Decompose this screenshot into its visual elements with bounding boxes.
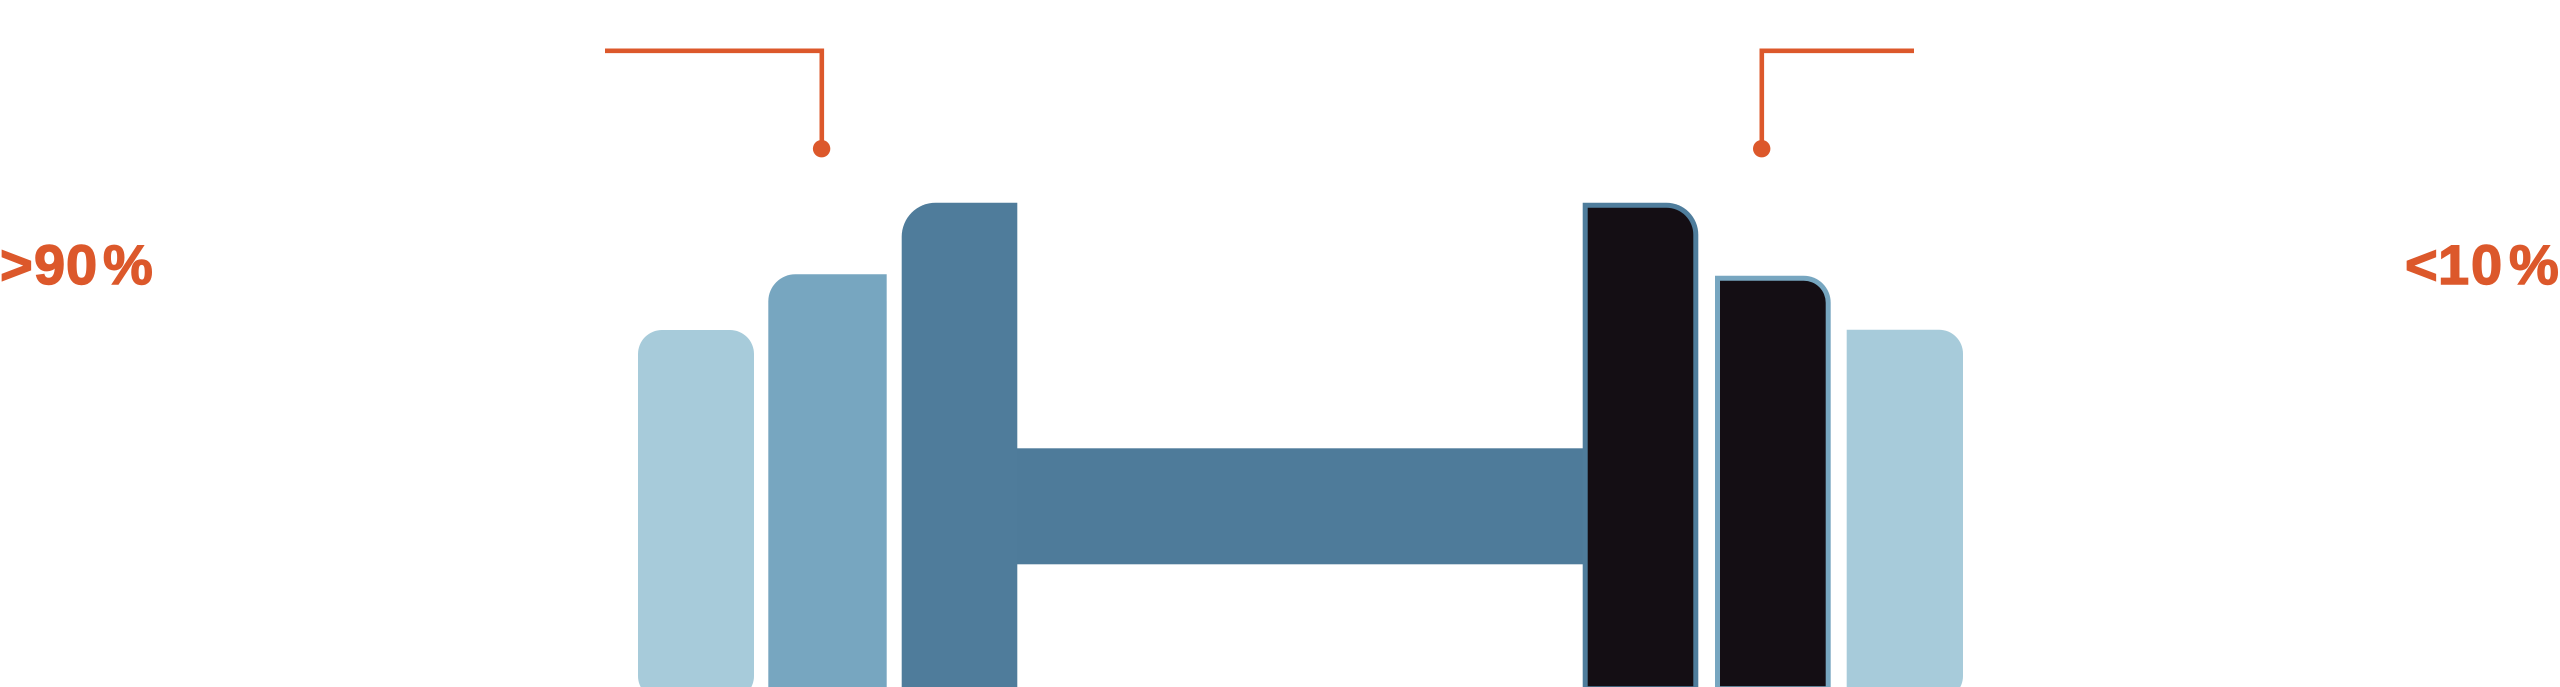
left inner plate xyxy=(902,203,1017,687)
left middle plate xyxy=(768,274,887,687)
right callout line xyxy=(1762,51,1914,148)
right outer plate xyxy=(1847,330,1963,687)
dumbbell xyxy=(638,203,1963,687)
right middle plate fill xyxy=(1720,281,1826,686)
left callout connector xyxy=(605,51,830,157)
right callout dot xyxy=(1753,140,1770,157)
left percentage label: >90% xyxy=(0,233,153,296)
right inner plate border xyxy=(1583,203,1698,687)
right middle plate border xyxy=(1715,276,1831,687)
right inner plate xyxy=(1583,203,1698,687)
left callout line xyxy=(605,51,822,148)
left outer plate xyxy=(638,330,754,687)
right percentage label: <10% xyxy=(2405,233,2559,296)
right callout connector xyxy=(1753,51,1914,157)
right inner plate fill xyxy=(1588,208,1693,686)
right middle plate xyxy=(1715,276,1831,687)
left callout dot xyxy=(813,140,830,157)
handle xyxy=(1017,448,1587,564)
